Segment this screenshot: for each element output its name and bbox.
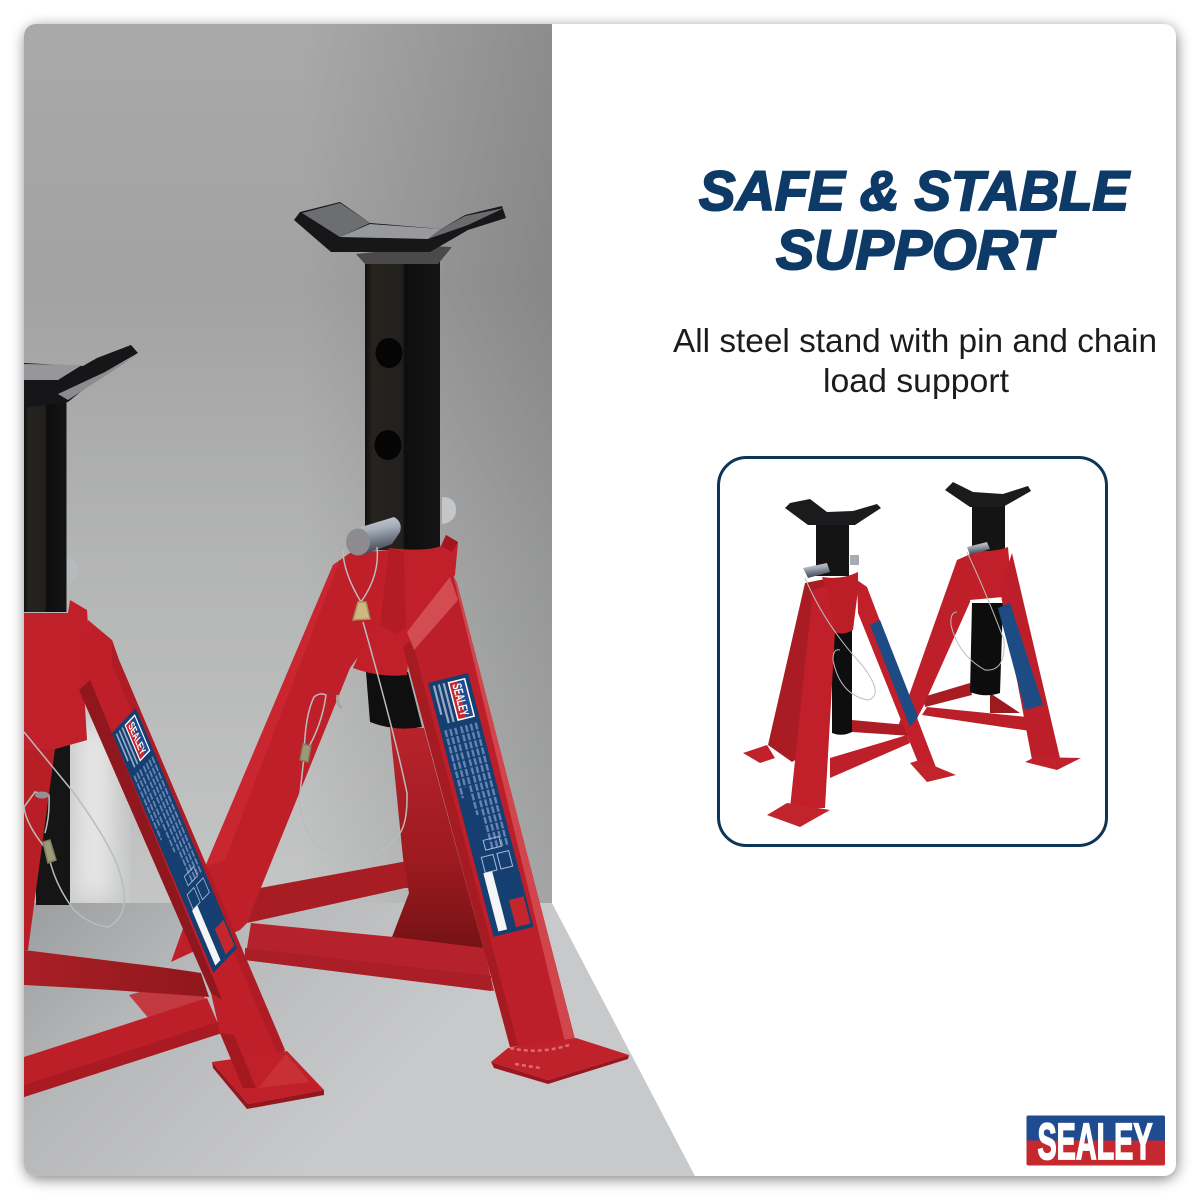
left leg xyxy=(24,738,87,950)
front stand saddle xyxy=(785,499,881,525)
front stand base plate right xyxy=(910,760,956,782)
back stand rear lower leg xyxy=(990,693,1020,713)
left angled leg xyxy=(171,550,390,962)
pin xyxy=(346,517,401,556)
large right jack stand xyxy=(171,202,629,1084)
heading: SUPPORT xyxy=(776,218,1057,281)
saddle xyxy=(24,345,138,408)
front stand left panel xyxy=(768,578,830,762)
front stand rear brace xyxy=(852,720,912,736)
upper black post xyxy=(365,258,440,550)
inset: front jack stand xyxy=(743,499,956,827)
front leg xyxy=(403,575,576,1047)
base plate right xyxy=(491,1038,629,1084)
body text: load support xyxy=(823,362,1009,399)
front stand front brace xyxy=(830,735,910,778)
back stand left leg xyxy=(895,552,975,735)
front stand wire xyxy=(805,578,875,700)
back stand rear bar xyxy=(923,683,972,707)
wall backdrop xyxy=(24,24,552,904)
front stand collar xyxy=(822,572,858,634)
lower cross brace xyxy=(24,950,209,997)
warning label: SEALEY xyxy=(126,719,148,758)
back stand lower post xyxy=(970,603,1003,695)
upper post xyxy=(24,400,66,612)
back stand pin xyxy=(967,542,990,555)
back stand front leg xyxy=(1000,553,1060,760)
back foot xyxy=(129,992,205,1018)
warning label xyxy=(428,673,534,937)
rear pin tip xyxy=(67,558,78,568)
heading xyxy=(698,170,1132,270)
left partial jack stand xyxy=(24,345,324,1109)
safety wire xyxy=(300,547,407,858)
floor xyxy=(24,903,695,1176)
warning label: SEALEY xyxy=(449,682,472,718)
back stand saddle xyxy=(945,482,1031,507)
back stand front bar xyxy=(922,707,1030,731)
near cross brace xyxy=(24,998,222,1097)
front stand rear foot xyxy=(743,745,775,763)
back stand base plate xyxy=(1025,757,1081,770)
warning label xyxy=(112,708,237,973)
rear leg xyxy=(390,728,484,950)
rear cross brace xyxy=(247,862,408,923)
front leg xyxy=(79,620,285,1088)
front stand base plate near xyxy=(767,803,830,827)
front stand label xyxy=(870,620,918,727)
collar xyxy=(353,535,458,676)
rear pin tip xyxy=(442,497,456,524)
photo panel: jack stands on grey background xyxy=(24,24,695,1176)
front stand main leg xyxy=(790,583,853,808)
front stand lower post xyxy=(832,630,852,735)
front stand rear pin xyxy=(850,555,859,565)
inset: back jack stand xyxy=(895,482,1081,770)
base plate xyxy=(212,1033,324,1109)
body text xyxy=(673,322,1157,399)
front stand right leg xyxy=(857,580,937,775)
front stand pin xyxy=(803,563,830,578)
body text: All steel stand with pin and chain xyxy=(673,322,1157,359)
back stand wire xyxy=(951,552,1004,670)
saddle xyxy=(294,202,506,264)
front stand upper post xyxy=(816,524,849,576)
lower black post xyxy=(36,745,70,905)
back stand label xyxy=(998,603,1043,710)
inset product frame xyxy=(718,458,1106,846)
safety wire xyxy=(24,732,124,927)
back stand collar xyxy=(970,547,1010,600)
collar xyxy=(24,600,88,750)
back stand upper post xyxy=(972,505,1005,553)
lower black sleeve xyxy=(366,672,422,729)
heading: SAFE & STABLE xyxy=(699,159,1131,222)
main cross bar xyxy=(245,923,494,991)
